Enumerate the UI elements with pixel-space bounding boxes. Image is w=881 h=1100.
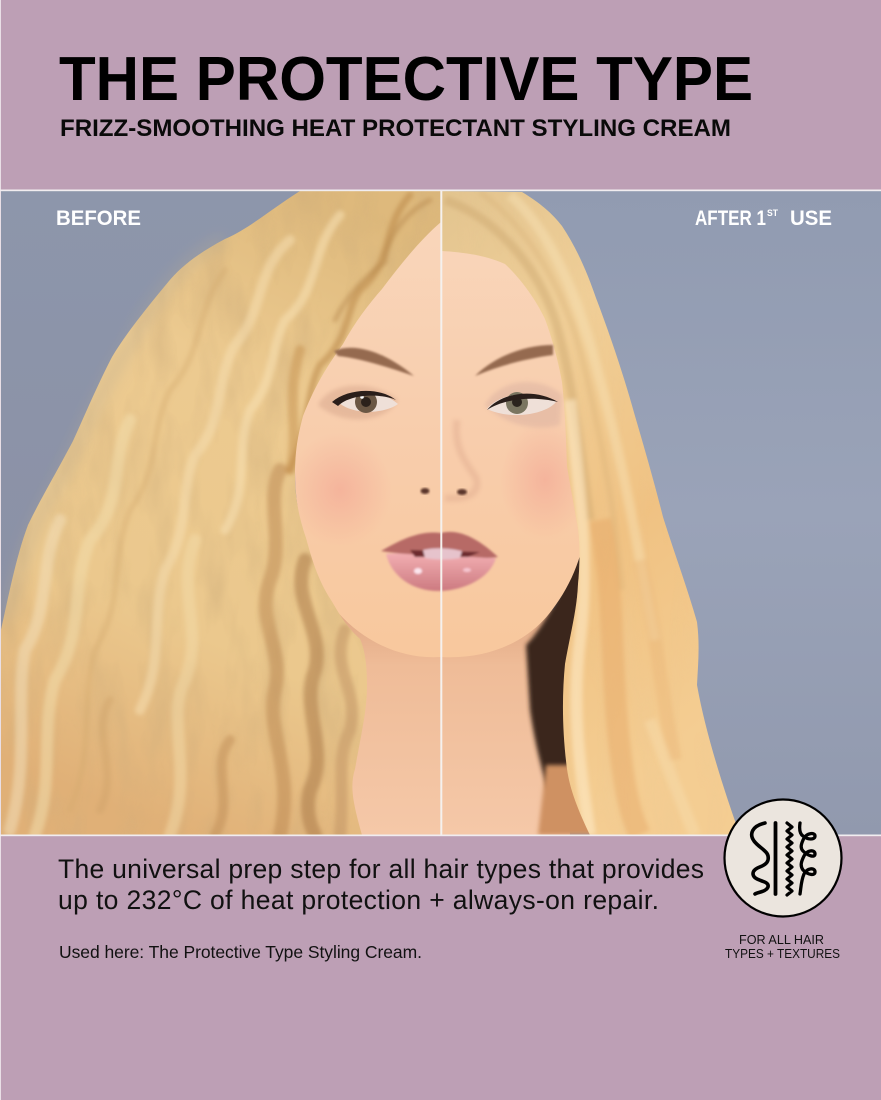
before and after photo of model	[0, 191, 881, 835]
title: THE PROTECTIVE TYPE	[59, 44, 753, 114]
neck	[330, 610, 570, 835]
photo background	[1, 191, 881, 835]
horizontal rule, bottom of photo	[0, 834, 881, 836]
label: after first use: ST	[767, 208, 778, 219]
icon: wavy hair	[752, 823, 768, 894]
label: after first use: AFTER 1	[695, 206, 766, 230]
label: before: BEFORE	[56, 206, 141, 230]
lips	[381, 532, 498, 591]
soft fly-away frizz	[6, 239, 225, 620]
icon: straight hair	[774, 823, 777, 894]
caption: for all hair types	[725, 933, 840, 961]
hair behind neck, right	[536, 762, 590, 834]
vertical divider	[440, 191, 442, 835]
caption: for all hair types: TYPES + TEXTURES	[725, 947, 840, 961]
icon: coily hair	[787, 823, 792, 895]
face	[295, 215, 586, 657]
nose	[420, 420, 477, 498]
eye right	[485, 382, 562, 428]
eye left	[318, 386, 398, 419]
subtitle: FRIZZ-SMOOTHING HEAT PROTECTANT STYLING CREAM	[60, 115, 731, 142]
cheek blush	[306, 440, 572, 528]
body copy	[58, 854, 704, 915]
eyebrows	[334, 345, 553, 376]
horizontal rule, top of photo	[0, 190, 881, 191]
icon: curly hair	[800, 823, 815, 894]
left frizzy hair	[0, 191, 441, 835]
right sleek hair	[441, 191, 761, 835]
body copy: The universal prep step for all hair types that provides	[58, 854, 704, 884]
icon: hair types badge	[724, 800, 842, 916]
body copy: up to 232°C of heat protection + always-on repair.	[58, 885, 659, 915]
label: after first use	[695, 206, 832, 230]
hair shadow under jaw	[522, 557, 580, 786]
product note: Used here: The Protective Type Styling Cream.	[59, 942, 422, 962]
label: after first use: USE	[790, 206, 832, 230]
caption: for all hair types: FOR ALL HAIR	[739, 933, 824, 947]
